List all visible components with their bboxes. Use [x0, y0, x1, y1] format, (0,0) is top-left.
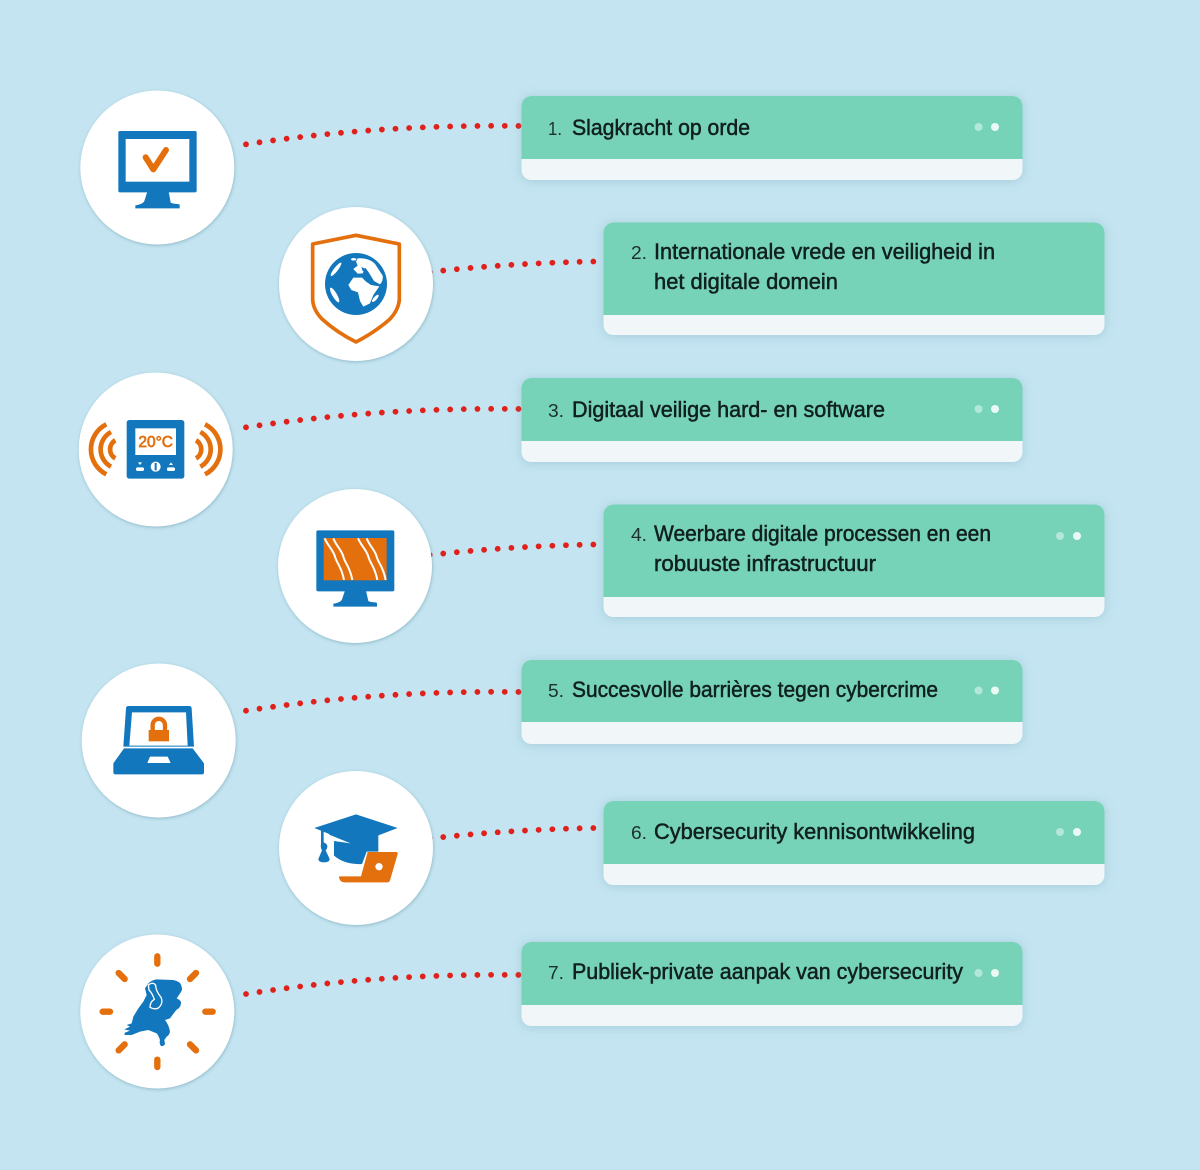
connector 6	[430, 828, 595, 838]
card 3	[522, 378, 1022, 462]
icon: map of the Netherlands	[124, 979, 182, 1046]
card 4: robuuste infrastructuur	[654, 551, 876, 576]
icon: monitor with wavy screen	[316, 530, 394, 607]
card 1: 1.	[548, 119, 562, 139]
icon: shield with globe	[313, 235, 399, 342]
icon: thermostat with signal waves	[91, 420, 220, 479]
card 1	[522, 96, 1022, 180]
icon circle 2	[279, 207, 433, 361]
connector 5	[246, 692, 522, 711]
card 6	[604, 801, 1104, 885]
card 6: 6.	[631, 823, 647, 843]
card 4: Weerbare digitale processen en een	[654, 521, 991, 546]
globe	[325, 253, 387, 315]
card 2: het digitale domein	[654, 269, 838, 294]
card 5: 5.	[548, 681, 564, 701]
item 3: Digitaal veilige hard- en software	[79, 372, 1022, 526]
connector 4	[430, 544, 595, 555]
item 2: Internationale vrede	[279, 207, 1104, 361]
card 1: Slagkracht op orde	[572, 115, 750, 140]
icon: rays	[103, 956, 213, 1067]
card 7: 7.	[548, 963, 564, 983]
card 2	[604, 222, 1104, 335]
card 5: Succesvolle barrières tegen cybercrime	[572, 677, 938, 702]
item 1: Slagkracht op orde	[80, 90, 1023, 244]
item 5: Succesvolle barrieres	[82, 660, 1022, 818]
icon circle 6	[279, 771, 433, 925]
card 5	[522, 660, 1022, 744]
icon: thermostat with signal waves: 20°C	[138, 434, 173, 451]
icon circle 5	[82, 664, 236, 818]
connector 3	[246, 409, 522, 427]
card 7: Publiek-private aanpak van cybersecurity	[572, 959, 963, 984]
connector 2	[430, 262, 595, 272]
icon circle 4	[278, 489, 432, 643]
card 3: Digitaal veilige hard- en software	[572, 397, 885, 422]
card 2: Internationale vrede en veiligheid in	[654, 239, 995, 264]
icon: monitor with check mark	[118, 131, 197, 208]
connector 7	[246, 975, 522, 994]
card 7	[522, 942, 1022, 1026]
icon: graduation cap with laptop	[314, 814, 398, 882]
icon: laptop with padlock	[113, 706, 204, 774]
item 4: Weerbare digitale processen	[278, 489, 1104, 643]
icon circle 7	[80, 934, 234, 1088]
icon circle 3	[79, 372, 233, 526]
item 6: Cybersecurity kennisontwikkeling	[279, 771, 1104, 925]
card 6: Cybersecurity kennisontwikkeling	[654, 819, 975, 844]
card 2: 2.	[631, 243, 647, 263]
shield outline	[313, 235, 399, 342]
card 4: 4.	[631, 525, 647, 545]
connector 1	[246, 126, 522, 144]
card 4	[604, 504, 1104, 617]
icon circle 1	[80, 90, 234, 244]
card 3: 3.	[548, 401, 564, 421]
item 7: Publiek-private aanpak	[80, 934, 1023, 1088]
